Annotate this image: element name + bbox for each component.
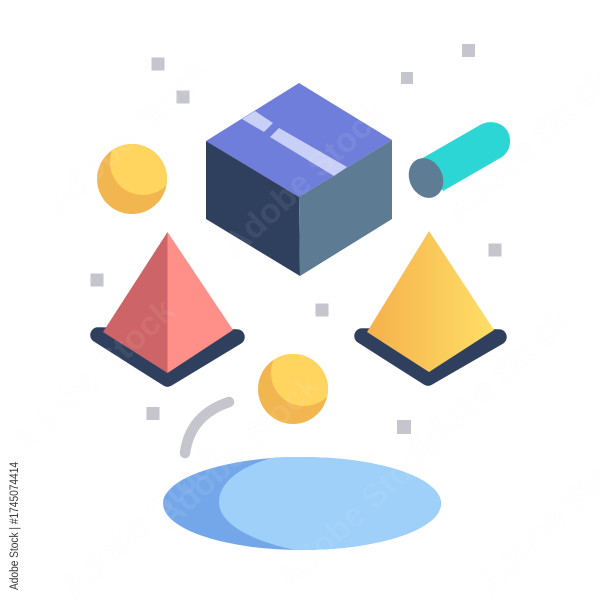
box right face	[299, 140, 392, 276]
box left face	[206, 141, 300, 276]
sphere shade	[258, 354, 328, 424]
box top face	[206, 83, 392, 197]
icon: blue ellipse	[163, 457, 441, 550]
watermark: Adobe Stock	[150, 366, 327, 536]
red pyramid base	[98, 335, 237, 379]
red pyramid right face	[168, 232, 233, 373]
sphere highlight	[110, 144, 167, 195]
icon: grey arc	[185, 402, 229, 453]
icon: upper yellow sphere	[97, 144, 167, 214]
watermark: Adobe Stock	[400, 301, 577, 471]
ellipse shadow	[163, 457, 441, 550]
icon: yellow pyramid	[362, 231, 499, 378]
red pyramid left face	[103, 232, 168, 373]
yellow pyramid base	[362, 336, 499, 378]
sphere highlight	[271, 354, 328, 406]
watermark: Adobe Stock	[270, 426, 447, 596]
watermark: Adobe Stock	[40, 51, 217, 221]
sphere shade	[97, 144, 167, 214]
box tape short piece	[242, 111, 273, 132]
cylinder body	[421, 122, 510, 191]
icon: teal cylinder	[402, 122, 510, 204]
icon: lower yellow sphere	[258, 354, 328, 424]
ellipse highlight	[219, 457, 441, 550]
scattered grey squares	[90, 44, 502, 434]
box tape long piece	[270, 128, 347, 176]
watermark: Adobe Stock	[216, 94, 393, 264]
illustration: isometric shapes	[9, 44, 510, 590]
icon: red pyramid	[98, 232, 237, 379]
watermark: Adobe Stock	[5, 291, 182, 461]
yellow pyramid face	[367, 231, 494, 372]
side credit text: Adobe Stock | #1745074414	[9, 461, 21, 590]
cylinder cap	[402, 152, 450, 204]
icon: cardboard box	[206, 83, 392, 276]
